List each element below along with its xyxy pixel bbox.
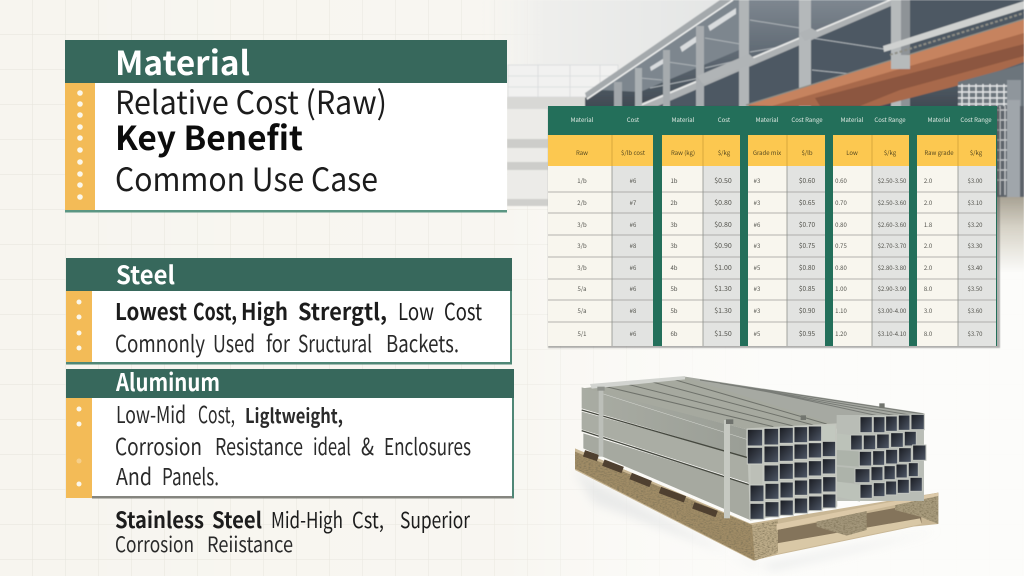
orange deck underside <box>746 26 1024 106</box>
data cells: #5 <box>754 329 760 338</box>
orange beam <box>746 19 1024 106</box>
data cells: #6 <box>630 263 637 272</box>
yellow sub-header row: $/kg <box>884 148 897 157</box>
building interior <box>585 0 1024 110</box>
text: steel benefit: Cost, <box>193 293 237 327</box>
text block: stainless steel: Mid-High <box>271 503 343 535</box>
panel: aluminum <box>66 363 514 498</box>
data cells: 0.70 <box>835 198 847 207</box>
data cells: 5b <box>670 284 678 293</box>
data cells: $3.70 <box>968 329 983 338</box>
data cells: #7 <box>630 198 637 207</box>
data cells: 2.0 <box>924 241 933 250</box>
text block: stainless steel: Cst, <box>352 503 384 535</box>
data cells: $1.50 <box>714 329 732 339</box>
text block: stainless steel: Stainless <box>115 503 204 535</box>
data cells: #6 <box>630 284 637 293</box>
text block: stainless steel <box>115 503 470 559</box>
text: aluminum use, second line: Panels. <box>162 458 219 492</box>
panel: material header card <box>65 37 507 212</box>
ground shadow <box>573 470 940 570</box>
data cells: #6 <box>630 220 637 229</box>
data cells: $0.95 <box>799 328 816 338</box>
text: steel use: Used <box>213 325 255 359</box>
pale warehouse behind the table <box>507 97 597 206</box>
text: aluminum use, second line: And <box>116 458 152 492</box>
data cells: 5b <box>670 306 678 315</box>
yellow sub-header row: Low <box>846 148 858 157</box>
data cells: #5 <box>754 263 760 272</box>
data cells: 5/a <box>578 306 586 315</box>
upper light beam <box>883 1 1024 52</box>
text: aluminum use: Resistance <box>215 428 303 462</box>
data cells: $2.60-3.60 <box>878 220 907 229</box>
data cells: $0.50 <box>714 176 732 186</box>
data cells: 2.0 <box>924 198 933 207</box>
yellow dotted stripe <box>65 83 95 210</box>
text: aluminum benefit: Low-Mid <box>116 396 186 430</box>
data cells: 6b <box>670 329 678 338</box>
data cells: 3b <box>670 220 678 229</box>
data cells: 8.0 <box>924 284 933 293</box>
data cells: 0.80 <box>835 220 847 229</box>
data cells: $3.50 <box>968 284 983 293</box>
data cells: $3.40 <box>968 263 983 272</box>
photo: bundled square steel tubes on a pallet <box>573 376 940 570</box>
data cells: 1.10 <box>835 306 847 315</box>
text: steel benefit: High <box>241 293 288 327</box>
text: steel use: for <box>266 325 290 359</box>
aluminum header band <box>66 369 514 398</box>
skylight glints <box>650 8 736 71</box>
data cells: #3 <box>754 284 760 293</box>
data cells: $3.00-4.00 <box>878 306 907 315</box>
yellow sub-header row: Raw (kg) <box>671 148 695 157</box>
heading: Steel: Steel <box>116 256 175 292</box>
data cells: 3/b <box>577 241 587 250</box>
data cells: $0.70 <box>799 219 816 229</box>
table header band: Cost Range <box>874 115 906 124</box>
text: aluminum benefit: Ligltweight, <box>245 400 343 429</box>
text block: stainless steel: Corrosion <box>115 529 194 559</box>
data cells: $1.30 <box>714 284 732 294</box>
steel straps <box>590 376 885 518</box>
table header band: Cost Range <box>960 115 992 124</box>
data cells: 0.75 <box>835 241 847 250</box>
text: steel benefit: Cost <box>444 293 482 327</box>
data cells: $0.80 <box>714 220 732 230</box>
data cells: #3 <box>754 198 760 207</box>
data cells: 2.0 <box>924 263 933 272</box>
yellow sub-header row: $/kg <box>970 148 983 157</box>
data cells: $0.80 <box>799 262 816 272</box>
text: steel use: Backets. <box>386 325 459 359</box>
data cells: $2.90-3.90 <box>878 284 907 293</box>
left tube stack <box>582 377 837 521</box>
mid-floor beam <box>636 0 905 106</box>
data cells: $0.90 <box>799 305 816 315</box>
text: aluminum use: Enclosures <box>384 428 471 462</box>
data cells: 2.0 <box>924 176 933 185</box>
text: steel use: Sructural <box>298 325 372 359</box>
data cells: 3.0 <box>924 306 933 315</box>
data cells: 1.8 <box>924 220 933 229</box>
data cells: 0.60 <box>835 176 847 185</box>
data cells: 2b <box>670 198 678 207</box>
table: material comparison grid <box>548 106 1000 348</box>
table header band: Material <box>928 115 951 124</box>
yellow dotted stripe <box>66 291 92 362</box>
text block: stainless steel: Reiistance <box>207 529 293 559</box>
yellow sub-header row: $/lb <box>801 148 813 157</box>
data cells: $1.00 <box>714 263 732 273</box>
data cells: 3b <box>670 241 678 250</box>
text: steel benefit: Lowest <box>115 293 187 327</box>
data cells: $3.10-4.10 <box>878 329 907 338</box>
data cells: 1.00 <box>835 284 847 293</box>
text: Key Benefit: Key Benefit <box>115 112 303 160</box>
table header band: Material <box>672 115 695 124</box>
data cells: $0.60 <box>799 175 816 185</box>
table header band: Cost Range <box>791 115 823 124</box>
text: Relative Cost (Raw): Relative Cost (Raw) <box>115 78 387 124</box>
data cells: 2/b <box>577 198 587 207</box>
right tube stack <box>685 377 926 502</box>
data cells: 0.80 <box>835 263 847 272</box>
yellow dotted stripe <box>66 398 92 498</box>
data cells: 3/b <box>577 220 587 229</box>
data cells: 3/b <box>577 263 587 272</box>
data cells: #6 <box>754 220 761 229</box>
yellow sub-header row: Grade mix <box>753 148 781 157</box>
data cells: $0.65 <box>799 197 816 207</box>
yellow sub-header row: Raw <box>576 148 588 157</box>
data cells: $0.85 <box>799 283 816 293</box>
heading: Material: Material <box>115 37 250 85</box>
table header band: Material <box>841 115 864 124</box>
data cells: #6 <box>630 329 637 338</box>
data cells: $0.75 <box>799 240 816 250</box>
text: Common Use Case: Common Use Case <box>115 155 378 201</box>
table header band <box>548 106 997 346</box>
data cells: $3.20 <box>968 220 983 229</box>
yellow sub-header row: $/lb cost <box>621 148 646 157</box>
table header band: Material <box>571 115 594 124</box>
steel header band <box>66 258 512 291</box>
text: steel benefit: Low <box>398 293 434 327</box>
data cells: #8 <box>630 306 637 315</box>
data cells: #3 <box>754 176 760 185</box>
data cells: #3 <box>754 241 760 250</box>
data cells: 8.0 <box>924 329 933 338</box>
data cells: 1/b <box>577 176 587 185</box>
data cells: 4b <box>670 263 678 272</box>
pale fence at left of the building <box>508 65 618 97</box>
table header band: Cost <box>718 115 731 124</box>
table header band: Cost <box>627 115 640 124</box>
text: aluminum use: & <box>361 428 374 462</box>
data cells: $2.50-3.60 <box>878 198 907 207</box>
text: aluminum use: Corrosion <box>115 428 202 462</box>
data cells: 1b <box>670 176 678 185</box>
panel: steel <box>66 256 512 364</box>
text: steel benefit: Strergtl, <box>298 293 387 327</box>
data cells: $2.80-3.80 <box>878 263 907 272</box>
text: aluminum benefit: Cost, <box>198 396 235 430</box>
columns <box>614 82 622 110</box>
yellow sub-header row: Raw grade <box>924 148 954 157</box>
data cells: $3.30 <box>968 241 983 250</box>
data cells: 1.20 <box>835 329 847 338</box>
data cells: 5/1 <box>577 329 587 338</box>
text: steel use: Comnonly <box>115 325 205 359</box>
data cells: $1.30 <box>714 306 732 316</box>
text: aluminum use: ideal <box>313 428 351 462</box>
data cells: #6 <box>630 176 637 185</box>
panel header band <box>65 40 507 83</box>
data cells: #3 <box>754 306 760 315</box>
roof beam <box>585 0 733 100</box>
data cells <box>548 166 996 346</box>
text block: stainless steel: Steel <box>212 503 262 535</box>
data cells: $3.00 <box>968 176 983 185</box>
mid beam repainted over columns <box>697 54 757 84</box>
heading: Aluminum: Aluminum <box>115 363 220 398</box>
data cells: $2.70-3.70 <box>878 241 907 250</box>
photo: steel building frame <box>480 0 1024 272</box>
table header band: Material <box>756 115 779 124</box>
yellow sub-header row: $/kg <box>718 148 731 157</box>
back wall with mesh <box>958 64 1024 110</box>
pallet <box>575 448 938 561</box>
text block: stainless steel: Superior <box>400 503 470 535</box>
data cells: $0.80 <box>714 198 732 208</box>
data cells: $0.90 <box>714 241 732 251</box>
data cells: $3.10 <box>968 198 983 207</box>
data cells: $2.50-3.50 <box>878 176 907 185</box>
data cells: $3.60 <box>968 306 983 315</box>
yellow sub-header row <box>548 135 996 166</box>
data cells: 5/a <box>578 284 586 293</box>
lower right: mesh, column and floor <box>996 106 1024 200</box>
data cells: #8 <box>630 241 637 250</box>
